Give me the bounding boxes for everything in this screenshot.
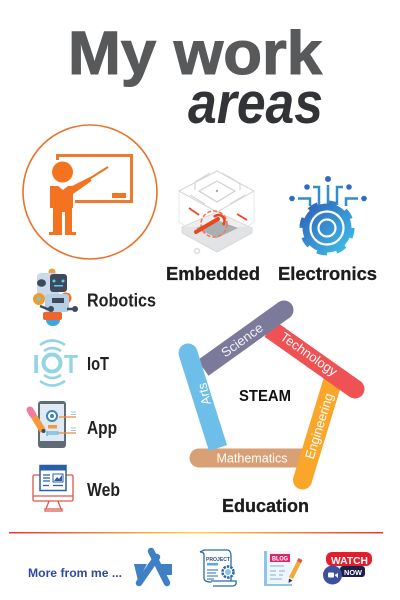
bar: Mathematics: Mathematics <box>216 451 288 466</box>
icon: blog notepad: BLOG <box>272 556 288 562</box>
chart: STEAM pentagon <box>178 300 364 490</box>
bar: Science <box>203 300 294 368</box>
bar: Technology <box>270 329 364 398</box>
divider <box>9 532 383 534</box>
bar: Mathematics <box>190 448 304 468</box>
label: Education: Education <box>222 495 309 516</box>
bar: Engineering <box>293 380 336 490</box>
icon: IoT <box>32 340 78 386</box>
label: Robotics: Robotics <box>87 290 156 310</box>
label: STEAM: STEAM <box>239 388 291 405</box>
icon: app phone and pencil <box>30 401 76 448</box>
title <box>68 19 323 136</box>
icon: electronics gear <box>289 176 367 253</box>
label: App: App <box>87 418 117 438</box>
label: IoT: IoT <box>87 354 109 374</box>
icon: web monitor <box>33 466 73 511</box>
icon: IoT: T <box>64 349 78 379</box>
icon: app store <box>134 551 172 583</box>
bar: Arts: Arts <box>194 381 214 406</box>
icon: watch now <box>323 552 372 584</box>
icon: watch now: NOW <box>344 568 363 577</box>
icon: IoT: I <box>32 349 40 379</box>
bar: Science: Science <box>218 320 266 360</box>
bar: Technology: Technology <box>278 329 341 379</box>
icon: teacher in circle <box>23 125 157 259</box>
title: areas <box>188 71 323 136</box>
icon: project scroll: PROJECT <box>206 557 231 563</box>
label: Embedded: Embedded <box>166 263 260 284</box>
title: My work <box>68 19 322 87</box>
icon: project scroll <box>200 550 236 586</box>
icon: embedded board <box>179 171 254 254</box>
icon: blog notepad <box>264 551 300 586</box>
icon: robot <box>33 268 78 326</box>
text: More from me: More from me ... <box>28 566 122 580</box>
label: Electronics: Electronics <box>278 263 377 284</box>
label: Web: Web <box>87 480 120 500</box>
bar: Engineering: Engineering <box>302 391 336 461</box>
bar: Arts <box>178 344 218 448</box>
icon: watch now: WATCH <box>331 556 368 567</box>
